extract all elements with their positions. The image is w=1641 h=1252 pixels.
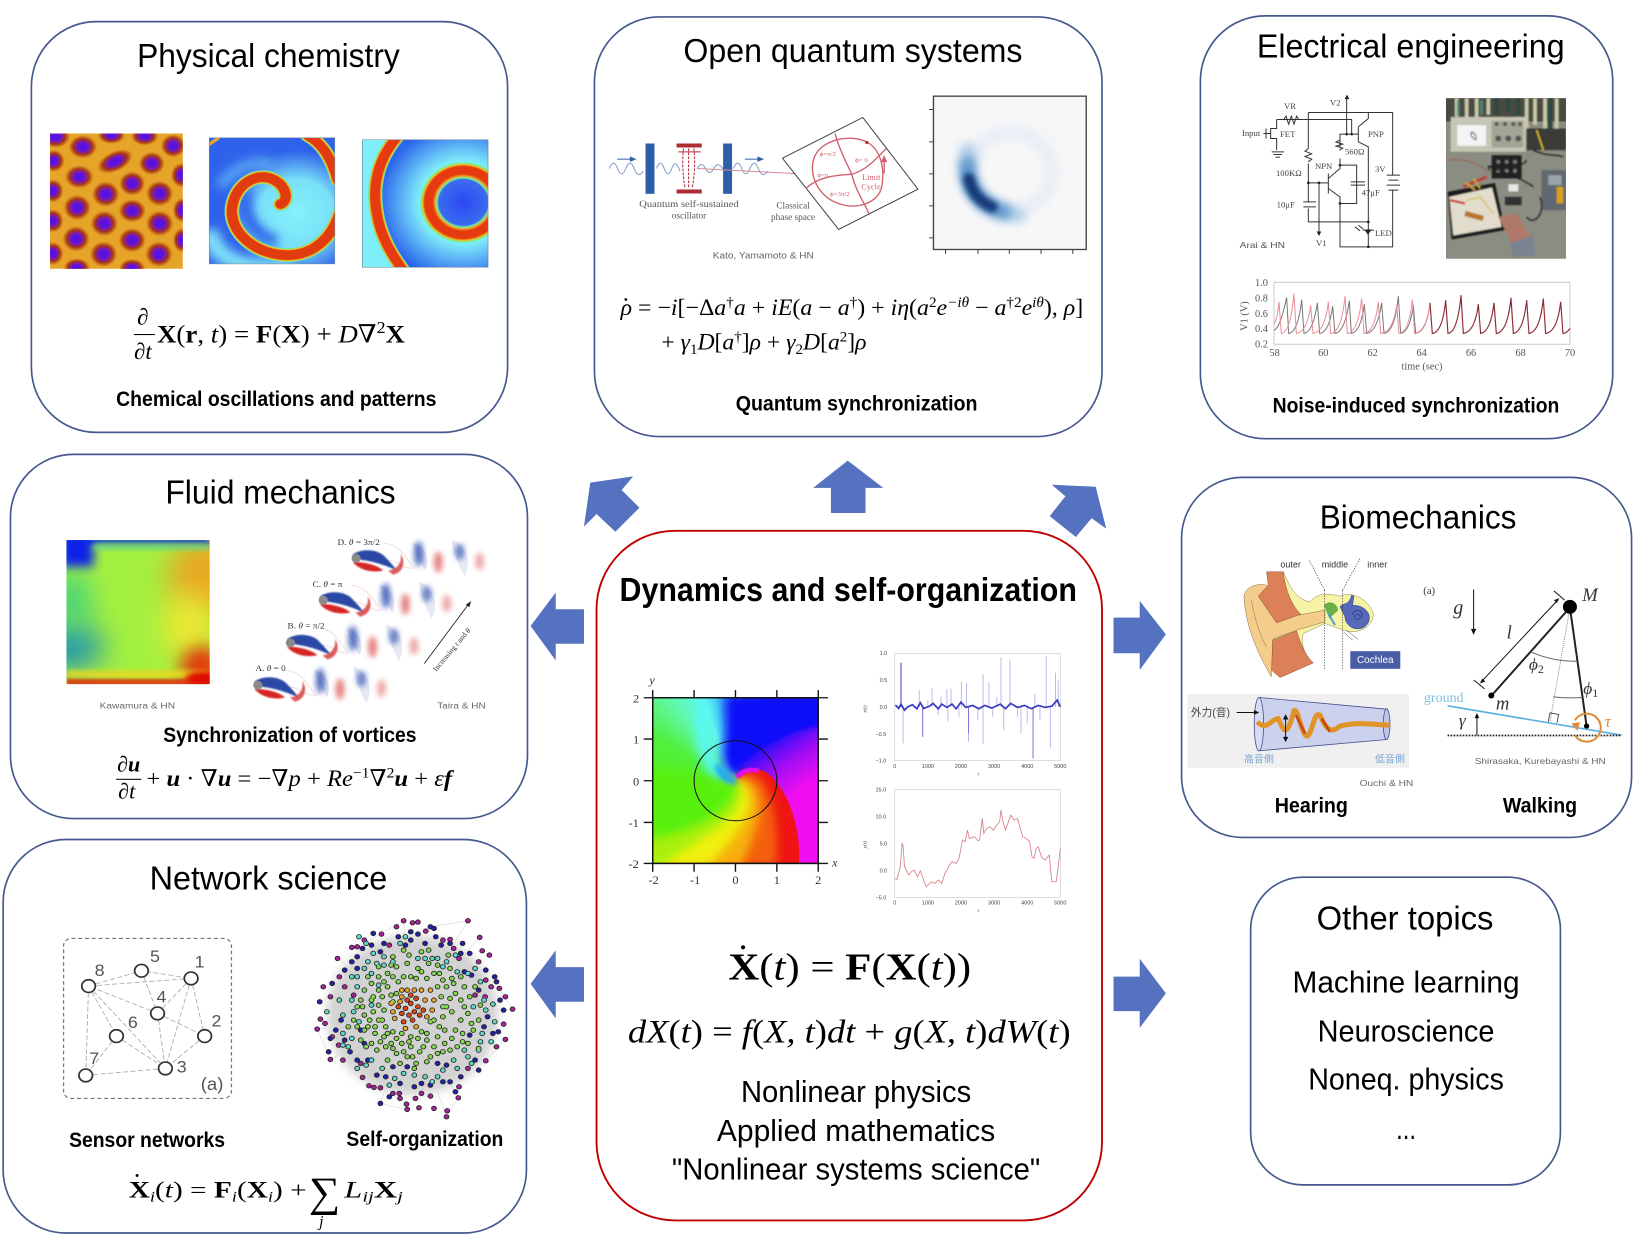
chart: y(t) time series: −5.0: [875, 895, 886, 901]
figure: quantum oscillator schematic: Cycle: [861, 183, 881, 191]
heatmap: turbulent flow field: [66, 540, 210, 708]
equation: coupled network dynamics: X: [374, 1176, 398, 1202]
equation: Navier-Stokes: [116, 751, 455, 804]
equation: quantum master equation: [a: [715, 329, 734, 355]
list: other topics: Machine learning: [1292, 966, 1520, 999]
equation: Navier-Stokes: + u · ∇u = −∇p + Re: [147, 765, 351, 791]
chart: noise-induced voltage traces: 0.2: [1255, 339, 1268, 350]
panel: fluid mechanics: [10, 454, 527, 819]
chart: x(t) time series: 2000: [955, 764, 967, 770]
equation: quantum master equation: ρ = −i[−Δa: [621, 294, 726, 320]
equation: quantum master equation: 2: [929, 295, 937, 311]
equation: coupled network dynamics: j: [394, 1190, 403, 1206]
caption: sensor networks: Sensor networks: [69, 1129, 225, 1152]
panel: network science: [3, 839, 526, 1233]
circuit diagram: Input: [1242, 128, 1261, 138]
figure: walking model: ground: [1424, 691, 1464, 706]
equation: quantum master equation: [a: [820, 329, 839, 355]
equation: quantum master equation: †: [734, 329, 742, 345]
equation: quantum master equation: e: [937, 294, 947, 320]
figure: sensor network: 7: [89, 1049, 99, 1068]
equation: quantum master equation: a: [734, 294, 746, 320]
heatmap: turbulent flow field: Kawamura & HN: [100, 701, 175, 710]
panel: other topics: [1251, 877, 1560, 1185]
chart: phase spiral colour map: 2: [633, 692, 639, 705]
arrow: to biomechanics: [1114, 601, 1166, 670]
equation: quantum master equation: †: [850, 295, 857, 311]
caption: chemical oscillations: Chemical oscillations and patterns: [116, 388, 436, 411]
chart: phase spiral colour map: 0: [732, 873, 739, 887]
chart: noise-induced voltage traces: 70: [1565, 348, 1575, 359]
equation: quantum master equation: + γ: [661, 329, 690, 355]
figure: quantum oscillator schematic: phase space: [771, 212, 815, 222]
equation: quantum master equation: ]: [742, 329, 750, 355]
chart: x(t) time series: x(t): [861, 705, 869, 714]
figure: walking model: 2: [1538, 662, 1544, 676]
circuit diagram: FET: [1280, 129, 1296, 139]
equation: reaction-diffusion: ∂: [137, 304, 148, 330]
figure: vortex wakes: C. θ = π: [313, 579, 343, 589]
list: other topics: ...: [1396, 1113, 1416, 1146]
circuit diagram: V1: [1316, 238, 1327, 248]
equation: quantum master equation: −: [969, 294, 994, 320]
chart: y(t) time series: 1000: [922, 900, 934, 906]
chart: y(t) time series: 0: [893, 900, 896, 906]
figure: sensor network: 3: [177, 1057, 187, 1077]
chart: noise-induced voltage traces: 1.0: [1255, 278, 1268, 289]
figure: ear anatomy: middle: [1322, 559, 1348, 569]
chart: y(t) time series: 5.0: [880, 841, 887, 847]
circuit diagram: Arai & HN: [1240, 240, 1285, 250]
chart: noise-induced voltage traces: 0.6: [1255, 309, 1268, 320]
chart: x(t) time series: 3000: [988, 764, 1000, 770]
circuit diagram: 560Ω: [1345, 146, 1364, 156]
heatmap: purple spot pattern: [50, 134, 183, 269]
chart: noise-induced voltage traces: time (sec): [1401, 361, 1442, 372]
chart: phase spiral colour map: [629, 673, 838, 887]
figure: vortex wakes: Taira & HN: [437, 701, 486, 710]
figure: ear anatomy: Cochlea: [1357, 655, 1394, 666]
equation: quantum master equation: [620, 294, 1083, 358]
figure: sensor network: 2: [211, 1011, 221, 1031]
figure: walking model: γ: [1459, 711, 1467, 730]
equation: quantum master equation: D: [802, 329, 820, 355]
figure: walking model: (a): [1423, 586, 1436, 597]
chart: x(t) time series: 0.5: [880, 678, 887, 684]
figure: sensor network: 4: [156, 987, 167, 1007]
equation: coupled network dynamics: (: [155, 1176, 165, 1202]
figure: quantum oscillator schematic: Limit: [862, 173, 881, 182]
circuit diagram: LED: [1375, 228, 1392, 238]
heading: network science: Network science: [150, 861, 387, 898]
equation: coupled network dynamics: (: [237, 1176, 247, 1202]
equation: quantum master equation: †2: [1006, 295, 1022, 311]
figure: walking model: ϕ: [1529, 655, 1538, 674]
text: fields: Nonlinear physics: [741, 1076, 971, 1109]
equation: coupled network dynamics: X: [247, 1176, 268, 1202]
circuit diagram: NPN: [1315, 161, 1333, 171]
chart: y(t) time series: 4000: [1021, 900, 1033, 906]
figure: walking model: M: [1581, 585, 1599, 606]
circuit diagram: 47μF: [1362, 187, 1380, 197]
equation: quantum master equation: 1: [690, 342, 698, 358]
chart: y(t) time series: 5000: [1054, 900, 1066, 906]
circuit diagram: 100KΩ: [1276, 168, 1302, 178]
chart: x(t) time series: [861, 651, 1066, 778]
equation: coupled network dynamics: ∑: [309, 1170, 340, 1216]
equation: quantum master equation: a: [994, 294, 1006, 320]
panel: dynamics and self-organization: [597, 531, 1102, 1220]
equation: coupled network dynamics: i: [268, 1190, 273, 1206]
chart: noise-induced voltage traces: 0.4: [1255, 324, 1268, 335]
chart: x(t) time series: 1000: [922, 764, 934, 770]
chart: phase spiral colour map: x: [831, 856, 838, 870]
figure: walking model: ϕ: [1583, 679, 1592, 698]
chart: noise-induced voltage traces: [1240, 278, 1575, 372]
figure: walking model: g: [1453, 597, 1463, 619]
equation: coupled network dynamics: t) = F: [165, 1176, 228, 1202]
circuit diagram: [1240, 94, 1400, 250]
circuit diagram: 3V: [1375, 164, 1386, 174]
chart: x(t) time series: 0.0: [880, 705, 887, 711]
chart: y(t) time series: 0.0: [880, 868, 887, 874]
equation: coupled network dynamics: i: [232, 1190, 237, 1206]
figure: sensor network: [64, 938, 231, 1098]
arrow: to network science: [531, 950, 584, 1018]
chart: x(t) time series: −1.0: [875, 759, 886, 765]
figure: sensor network: 5: [150, 947, 160, 966]
arrow: to physical chemistry: [584, 476, 639, 532]
chart: noise-induced voltage traces: 60: [1318, 348, 1328, 359]
figure: vortex wakes: A. θ = 0: [255, 663, 286, 673]
figures: chemical patterns: [50, 134, 488, 269]
equation: coupled network dynamics: j: [317, 1214, 324, 1231]
chart: y(t) time series: 10.0: [875, 814, 886, 820]
heatmap: spiral wave: [205, 135, 339, 269]
circuit diagram: PNP: [1368, 129, 1384, 139]
figure: walking model: m: [1496, 693, 1509, 714]
figure: quantum oscillator schematic: Quantum self-sustained: [639, 199, 739, 209]
panel: open quantum systems: [594, 17, 1102, 437]
chart: noise-induced voltage traces: 0.8: [1255, 293, 1268, 304]
figure: vortex wakes: D. θ = 3π/2: [338, 537, 380, 547]
panel: electrical engineering: [1200, 16, 1613, 439]
chart: quantum phase-space density: [929, 96, 1086, 254]
figure: ear anatomy: inner: [1367, 559, 1387, 569]
chart: y(t) time series: 2000: [955, 900, 967, 906]
figure: quantum oscillator schematic: oscillator: [672, 211, 706, 220]
chart: noise-induced voltage traces: 66: [1466, 348, 1476, 359]
equation: quantum master equation: iη(a: [891, 294, 929, 320]
chart: y(t) time series: [861, 787, 1066, 914]
heading: open quantum systems: Open quantum systems: [683, 33, 1022, 70]
chart: noise-induced voltage traces: V1 (V): [1240, 301, 1251, 331]
figure: sensor network: 1: [195, 952, 205, 971]
chart: noise-induced voltage traces: 62: [1367, 348, 1378, 359]
figure: sensor network: 6: [128, 1013, 138, 1032]
chart: x(t) time series: −0.5: [875, 732, 886, 738]
figure: sensor network: 8: [95, 961, 105, 980]
chart: y(t) time series: y(t): [861, 841, 869, 849]
equation: deterministic dynamics: X(t) = F(X(t)): [728, 947, 971, 989]
figure: sensor network: (a): [201, 1075, 223, 1094]
equation: reaction-diffusion: [134, 304, 405, 364]
chart: phase spiral colour map: 1: [774, 873, 780, 887]
equation: quantum master equation: ρ + γ: [750, 329, 795, 355]
list: other topics: Neuroscience: [1318, 1015, 1494, 1048]
heading: fluid mechanics: Fluid mechanics: [165, 475, 396, 512]
chart: x(t) time series: 4000: [1021, 764, 1033, 770]
chart: x(t) time series: 0: [893, 764, 896, 770]
list: other topics: Noneq. physics: [1308, 1064, 1504, 1097]
figure: walking model: l: [1507, 622, 1512, 643]
arrow: to fluid mechanics: [531, 593, 584, 661]
chart: x(t) time series: 5000: [1054, 764, 1066, 770]
equation: reaction-diffusion: 2: [377, 318, 386, 337]
heading: other topics: Other topics: [1317, 901, 1493, 938]
figure: basilar membrane: 高音側: [1244, 752, 1274, 765]
equation: quantum master equation: ρ: [854, 329, 867, 355]
equation: quantum master equation: + iE(a − a: [752, 294, 849, 320]
figure: quantum oscillator schematic: ϕ= 0: [855, 157, 868, 164]
chart: x(t) time series: t: [977, 772, 979, 778]
caption: self-organization: Self-organization: [346, 1128, 503, 1151]
chart: phase spiral colour map: -1: [629, 816, 639, 830]
equation: coupled network dynamics: ) +: [273, 1176, 307, 1202]
arrow: to open quantum systems: [813, 461, 883, 513]
figure: quantum oscillator schematic: [609, 117, 918, 260]
equation: reaction-diffusion: X: [386, 321, 405, 348]
figure: basilar membrane: 外力(音): [1191, 706, 1230, 719]
figure: ear anatomy: [1244, 558, 1400, 677]
chart: y(t) time series: 15.0: [875, 787, 886, 793]
list: other topics: [1292, 966, 1520, 1146]
chart: y(t) time series: t: [977, 908, 979, 914]
figure: ear anatomy: outer: [1280, 559, 1301, 569]
equation: coupled network dynamics: L: [343, 1176, 362, 1202]
figure: basilar membrane: [1187, 694, 1413, 788]
equation: quantum master equation: ]: [847, 329, 855, 355]
equation: stochastic dynamics: dX(t) = f(X, t)dt + g(X, t)dW(t): [628, 1015, 1071, 1051]
equation: coupled network dynamics: ij: [362, 1190, 374, 1206]
text: fields: [672, 1076, 1040, 1187]
equation: quantum master equation: ),: [1044, 294, 1064, 320]
heading: physical chemistry: Physical chemistry: [137, 38, 400, 75]
caption: hearing: Hearing: [1275, 794, 1348, 817]
equation: Navier-Stokes: 2: [387, 766, 394, 782]
equation: Navier-Stokes: −1: [353, 766, 369, 782]
equation: coupled network dynamics: i: [150, 1190, 155, 1206]
figure: quantum oscillator schematic: ϕ=π: [817, 172, 829, 179]
heatmap: target wave: [362, 140, 488, 268]
heading: dynamics and self-organization: Dynamics and self-organization: [620, 572, 1077, 609]
figure: walking model: 1: [1592, 686, 1598, 700]
chart: phase spiral colour map: 1: [633, 733, 639, 747]
arrow: to electrical engineering: [1050, 485, 1106, 537]
text: fields: Applied mathematics: [717, 1115, 995, 1148]
caption: walking: Walking: [1503, 794, 1577, 817]
figure: quantum oscillator schematic: ϕ=π/2: [820, 151, 837, 158]
caption: quantum synchronization: Quantum synchronization: [736, 392, 977, 415]
equation: quantum master equation: 2: [795, 342, 803, 358]
circuit diagram: V2: [1330, 97, 1341, 107]
caption: noise-induced synchronization: Noise-induced synchronization: [1273, 395, 1559, 418]
figure: vortex wakes: [253, 537, 486, 710]
caption: synchronization of vortices: Synchronization of vortices: [163, 724, 417, 747]
figure: quantum oscillator schematic: ϕ=3π/2: [830, 191, 850, 198]
figure: vortex wakes: B. θ = π/2: [288, 621, 325, 630]
figure: walking model: Shirasaka, Kurebayashi & HN: [1475, 756, 1606, 766]
figure: basilar membrane: Ouchi & HN: [1360, 778, 1413, 788]
text: fields: "Nonlinear systems science": [672, 1154, 1040, 1187]
equation: quantum master equation: †: [726, 295, 734, 311]
circuit diagram: 10μF: [1277, 199, 1295, 209]
equation: quantum master equation: e: [1022, 294, 1032, 320]
equation: Navier-Stokes: u: [394, 765, 408, 791]
chart: phase spiral colour map: 2: [815, 873, 821, 887]
chart: x(t) time series: 1.0: [880, 651, 887, 657]
arrow: to other topics: [1114, 959, 1166, 1028]
chart: noise-induced voltage traces: 58: [1269, 348, 1280, 359]
equation: Navier-Stokes: ∂t: [118, 779, 136, 804]
equation: reaction-diffusion: ∂t: [134, 338, 152, 364]
figure: walking model: τ: [1605, 712, 1612, 731]
photo: electronics bench: [1446, 98, 1566, 259]
panel: biomechanics: [1182, 477, 1632, 837]
figure: quantum oscillator schematic: Classical: [776, 201, 810, 210]
chart: noise-induced voltage traces: 64: [1416, 348, 1427, 359]
equation: quantum master equation: iθ: [1032, 295, 1044, 311]
chart: phase spiral colour map: -1: [690, 873, 700, 887]
equation: Navier-Stokes: ∇: [369, 765, 387, 791]
figure: self-organized network: [317, 921, 513, 1117]
equation: Navier-Stokes: ∂u: [117, 751, 140, 776]
figure: vortex wakes: Increasing t and θ: [431, 626, 473, 673]
equation: Navier-Stokes: + εf: [414, 765, 452, 791]
chart: noise-induced voltage traces: 68: [1515, 348, 1526, 359]
equation: reaction-diffusion: X(r, t) = F(X) + D∇: [157, 321, 375, 348]
chart: phase spiral colour map: 0: [633, 775, 639, 788]
equation: coupled network dynamics: [129, 1170, 403, 1231]
figure: walking model: [1423, 585, 1622, 766]
figure: quantum oscillator schematic: Kato, Yamamoto & HN: [713, 251, 814, 260]
chart: phase spiral colour map: -2: [629, 857, 639, 871]
heading: biomechanics: Biomechanics: [1320, 500, 1516, 537]
equation: quantum master equation: 2: [840, 329, 847, 345]
chart: phase spiral colour map: -2: [649, 873, 659, 887]
heading: electrical engineering: Electrical engineering: [1257, 29, 1565, 66]
equation: quantum master equation: D: [696, 329, 715, 355]
circuit diagram: VR: [1284, 101, 1296, 111]
equation: quantum master equation: ) +: [857, 294, 891, 320]
chart: y(t) time series: 3000: [988, 900, 1000, 906]
equation: quantum master equation: −iθ: [947, 295, 969, 311]
equation: coupled network dynamics: X: [129, 1176, 150, 1202]
panel: physical chemistry: [31, 22, 508, 432]
figure: basilar membrane: 低音側: [1375, 752, 1405, 765]
equation: quantum master equation: ρ]: [1064, 294, 1083, 320]
chart: phase spiral colour map: y: [647, 673, 655, 687]
